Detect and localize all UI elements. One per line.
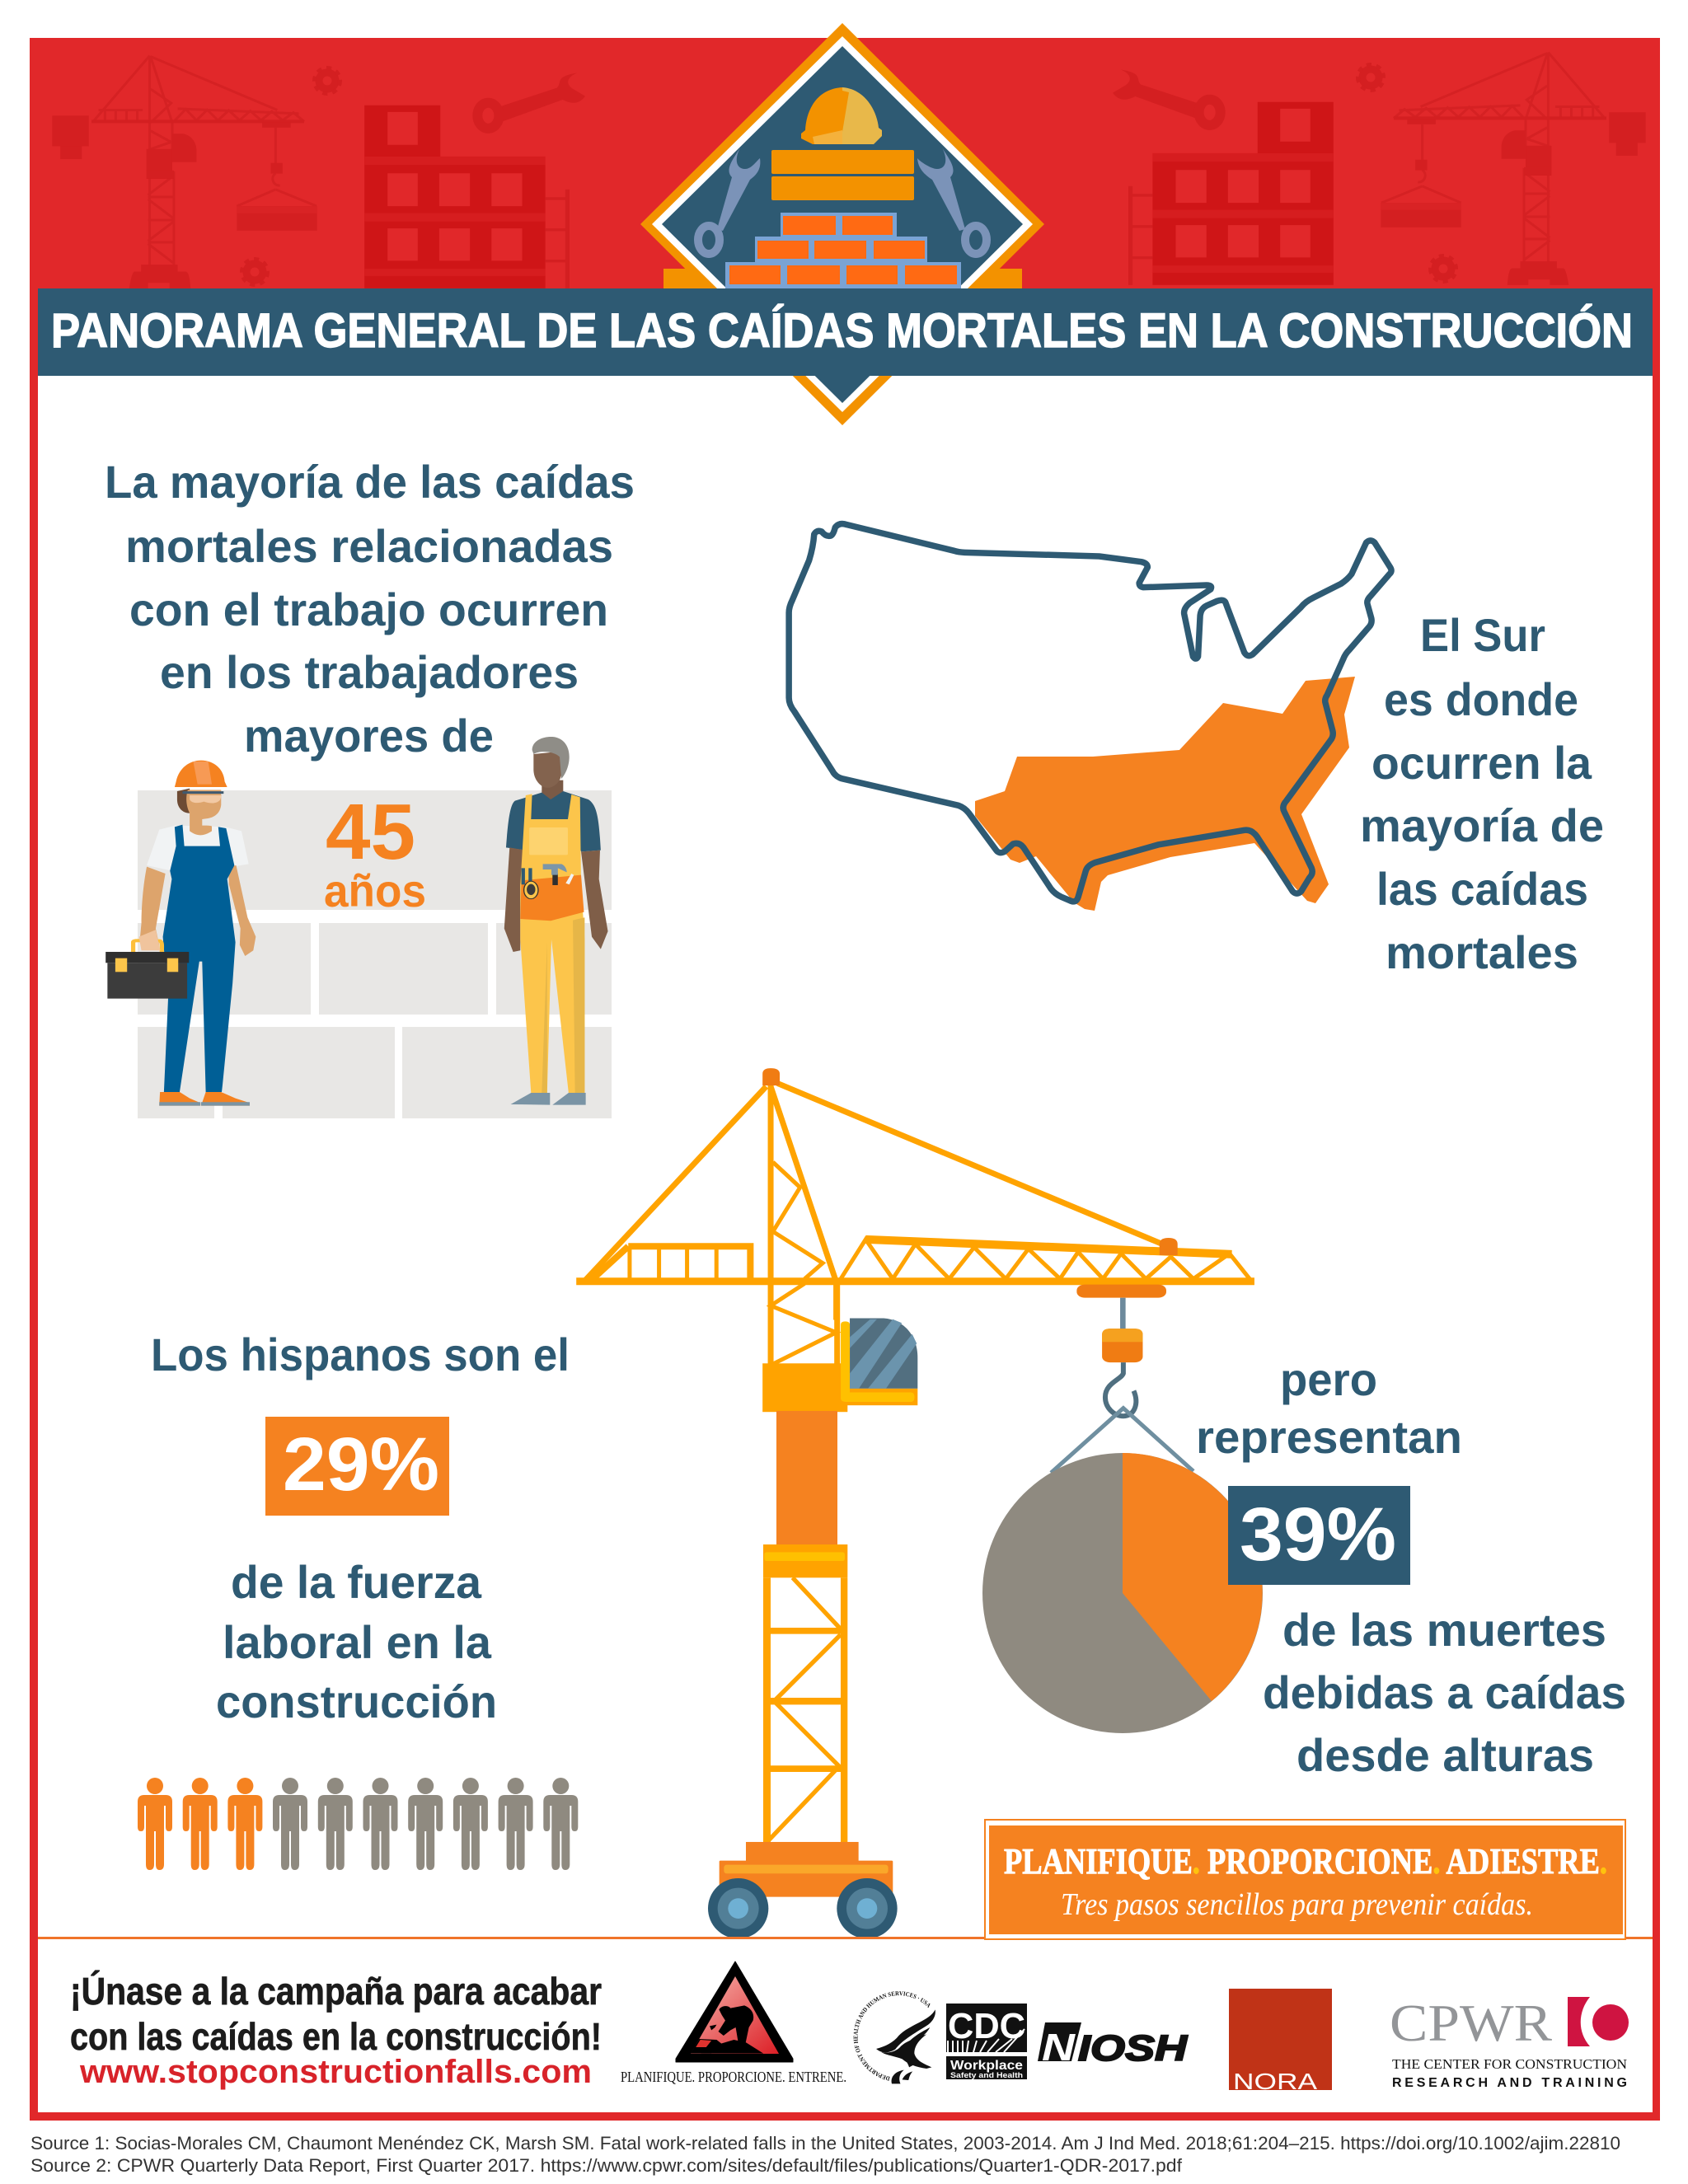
text: Hispanic workforce statement: Los hispanos son el [151,1329,570,1380]
text block: South statement [1360,609,1604,978]
text: of the construction workforce: de la fuerza [231,1556,482,1608]
45 años stat: 45 [326,788,415,876]
illustration: woman worker with toolbox [106,761,256,1106]
logo: NIOSH: IOSH [1078,2028,1188,2069]
tower column [776,1411,837,1547]
text: of the construction workforce: construcción [216,1675,497,1727]
campaign call to action [70,1970,602,2090]
text block: South statement: las caídas [1376,863,1588,915]
crane jib and upper mast [576,1083,1254,1366]
text block: South statement: El Sur [1420,609,1545,661]
right wrench [917,148,987,254]
text: of deaths from falls from heights: debidas a caídas [1263,1666,1626,1718]
text: of the construction workforce: laboral en la [223,1616,492,1668]
text block: South statement: es donde [1384,673,1578,725]
pictogram: 3 of 10 people [138,1778,578,1870]
campaign call to action: ¡Únase a la campaña para acabar [70,1970,602,2013]
stat box: 39%: 39% [1240,1493,1396,1577]
header background pattern: left [52,56,585,288]
logo: NIOSH [1038,2022,1188,2069]
text block: South statement: mayoría de [1360,799,1604,851]
45 años stat: años [324,865,426,916]
ground divider line [38,1937,1653,1939]
logo: NIOSH: N [1042,2026,1076,2069]
hook and ropes [1051,1362,1193,1473]
left wrench [698,148,760,254]
text block: South statement: mortales [1386,926,1578,978]
crane cap lights and trolley [762,1068,1178,1362]
title banner [38,288,1653,376]
logo: CPWR [1390,1994,1629,2090]
text block: age statement: mortales relacionadas [125,520,613,572]
US map with highlighted South [789,524,1391,911]
emblem diamond [640,23,1044,425]
pie chart: 39% of fall deaths [982,1453,1263,1733]
text block: age statement: La mayoría de las caídas [105,456,635,508]
illustration: tower crane [576,1068,1254,1938]
callout: plan provide train: PLANIFIQUE. PROPORCIONE. ADIESTRE. [1004,1841,1607,1882]
operator cab [762,1319,917,1412]
illustration: older man with tool belt [504,737,608,1105]
lower lattice mast and wheeled base [708,1544,898,1938]
text: but they represent: representan [1196,1411,1462,1463]
callout: plan provide train [985,1820,1625,1939]
logo: NORA: NORA [1233,2069,1317,2094]
logo: CPWR: RESEARCH AND TRAINING [1392,2076,1627,2090]
stacked beams [771,150,914,200]
brick pile [725,213,961,288]
callout: plan provide train: Tres pasos sencillos para prevenir caídas. [1061,1887,1533,1922]
stat box: 29%: 29% [283,1422,439,1507]
logo: falls campaign warning triangle [621,1961,846,2085]
logo: NORA [1229,1989,1332,2094]
crane silhouette [52,56,317,288]
text: but they represent [1196,1353,1462,1463]
source citations [30,2133,1620,2176]
logo: CDC workplace safety and health: CDC [948,2006,1025,2046]
wrench silhouette [477,73,585,129]
logo: falls campaign warning triangle: PLANIFIQUE. PROPORCIONE. ENTRENE. [621,2069,846,2085]
logo: CDC workplace safety and health [946,2004,1027,2079]
gear silhouettes [242,68,340,285]
eagle [876,2009,935,2083]
header background pattern: right [1113,53,1646,285]
text block: age statement: en los trabajadores [160,646,579,698]
text block: age statement: con el trabajo ocurren [129,583,608,635]
logo: HHS eagle seal: DEPARTMENT OF HEALTH AND HUMAN SERVICES · USA [854,1991,930,2081]
worker silhouette [691,2005,763,2054]
logo: CDC workplace safety and health: Workplace [950,2059,1023,2073]
US outline [789,524,1391,902]
text block: South statement: ocurren la [1372,737,1592,789]
campaign call to action: www.stopconstructionfalls.com [79,2054,592,2090]
hard hat [801,87,882,144]
logo: CPWR: CPWR [1390,1994,1552,2052]
source citations: Source 1: Socias-Morales CM, Chaumont Menéndez CK, Marsh SM. Fatal work-related falls in the United States, 2003-2014. Am J Ind Med. 2018;61:204–215. https://doi.org/10.1002/ajim.22810 [30,2133,1620,2154]
text block: age statement [105,456,635,762]
brick wall backdrop [138,790,612,1118]
text: of the construction workforce [216,1556,497,1727]
logo: CDC workplace safety and health: Safety and Health [950,2071,1023,2079]
logo: CPWR: THE CENTER FOR CONSTRUCTION [1392,2056,1627,2072]
campaign call to action: con las caídas en la construcción! [70,2015,602,2058]
text: of deaths from falls from heights: desde alturas [1296,1729,1594,1781]
building silhouette [364,105,570,288]
South region fill [975,677,1355,911]
45 años stat [324,788,426,916]
source citations: Source 2: CPWR Quarterly Data Report, First Quarter 2017. https://www.cpwr.com/sites/default/files/publications/Quarter1-QDR-2017.pdf [30,2155,1183,2176]
text: of deaths from falls from heights: de las muertes [1282,1604,1606,1656]
text: of deaths from falls from heights [1263,1604,1626,1781]
text: but they represent: pero [1280,1353,1377,1405]
text block: age statement: mayores de [244,710,494,762]
